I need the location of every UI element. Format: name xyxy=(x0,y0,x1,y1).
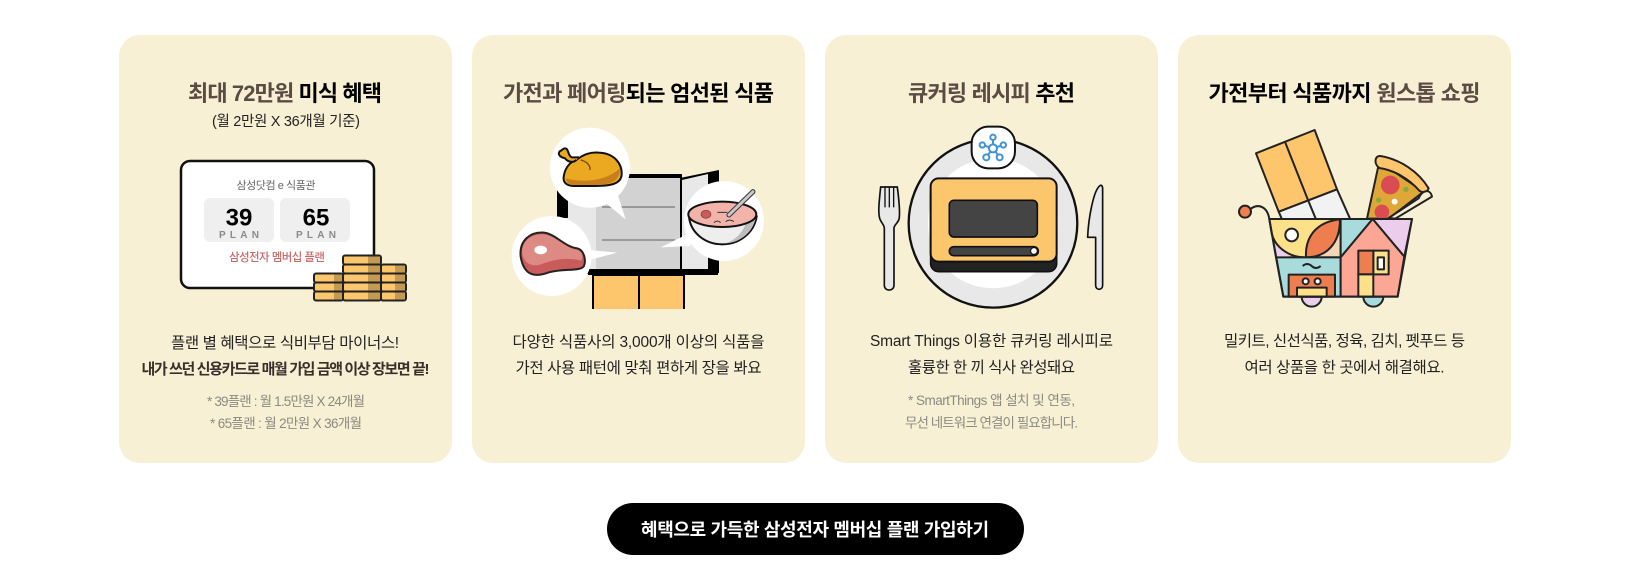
heading: benefit title: 최대 72만원 미식 혜택 xyxy=(188,81,382,106)
plan card illustration: 삼성닷컴 e 식품관 xyxy=(236,179,316,192)
note: plan terms: * 65플랜 : 월 2만원 X 36개월 xyxy=(210,416,362,431)
plan card illustration: PLAN xyxy=(219,230,259,241)
text: benefit description xyxy=(142,334,430,378)
icon: roast chicken bubble xyxy=(550,128,630,219)
illustration: plate with oven xyxy=(909,139,1077,308)
heading: recipe title: 큐커링 레시피 추천 xyxy=(908,81,1075,106)
text: benefit description: 내가 쓰던 신용카드로 매월 가입 금액 이상 장보면 끝! xyxy=(142,361,430,378)
icon: knife xyxy=(1088,185,1103,289)
illustration: pizza slice xyxy=(1367,156,1432,219)
note: SmartThings requirements: * SmartThings 앱 설치 및 연동, xyxy=(908,393,1075,408)
text: benefit description: 플랜 별 혜택으로 식비부담 마이너스! xyxy=(171,334,399,352)
subheading: monthly basis: (월 2만원 X 36개월 기준) xyxy=(212,113,360,130)
panel: paired groceries xyxy=(472,35,805,463)
icon: fork xyxy=(879,187,900,290)
plan card illustration: 65 xyxy=(303,204,329,232)
panel: recipe recommendation xyxy=(825,35,1158,463)
text: groceries description: 가전 사용 패턴에 맞춰 편하게 장을 봐요 xyxy=(516,359,762,377)
text: groceries description: 다양한 식품사의 3,000개 이상의 식품을 xyxy=(512,333,764,351)
plan card illustration: 삼성전자 멤버십 플랜 xyxy=(229,251,325,264)
text: recipe description: Smart Things 이용한 큐커링 레시피로 xyxy=(870,332,1113,350)
icon: SmartThings badge xyxy=(972,127,1015,168)
panel: monthly dining benefit xyxy=(119,35,452,463)
illustration: open fridge xyxy=(557,170,719,312)
icon: steak bubble xyxy=(512,216,617,296)
plan card illustration: 39 xyxy=(226,204,252,232)
button: membership sign-up: 혜택으로 가득한 삼성전자 멤버십 플랜 가입하기 xyxy=(641,520,989,540)
text: shopping description xyxy=(1224,332,1465,376)
icon: coin stacks xyxy=(314,256,406,300)
note: SmartThings requirements xyxy=(905,393,1078,430)
plan card illustration: PLAN xyxy=(296,230,336,241)
note: SmartThings requirements: 무선 네트워크 연결이 필요합니다. xyxy=(905,416,1078,430)
text: shopping description: 여러 상품을 한 곳에서 해결해요. xyxy=(1244,358,1444,376)
text: groceries description xyxy=(512,333,764,377)
note: plan terms xyxy=(207,394,365,431)
note: plan terms: * 39플랜 : 월 1.5만원 X 24개월 xyxy=(207,394,365,409)
text: recipe description xyxy=(870,332,1113,376)
icon: soup bowl bubble xyxy=(661,181,764,261)
illustration: shopping cart xyxy=(1239,206,1412,307)
panel: one-stop shopping xyxy=(1178,35,1511,463)
button: membership sign-up xyxy=(607,503,1024,555)
heading: paired groceries title: 가전과 페어링되는 엄선된 식품 xyxy=(503,81,774,106)
text: recipe description: 훌륭한 한 끼 식사 완성돼요 xyxy=(908,358,1075,376)
text: shopping description: 밀키트, 신선식품, 정육, 김치, 펫푸드 등 xyxy=(1224,332,1465,350)
illustration: tilted fridge xyxy=(1256,130,1350,219)
heading: one-stop shopping title: 가전부터 식품까지 원스톱 쇼핑 xyxy=(1208,81,1480,106)
plan card illustration xyxy=(181,161,374,288)
